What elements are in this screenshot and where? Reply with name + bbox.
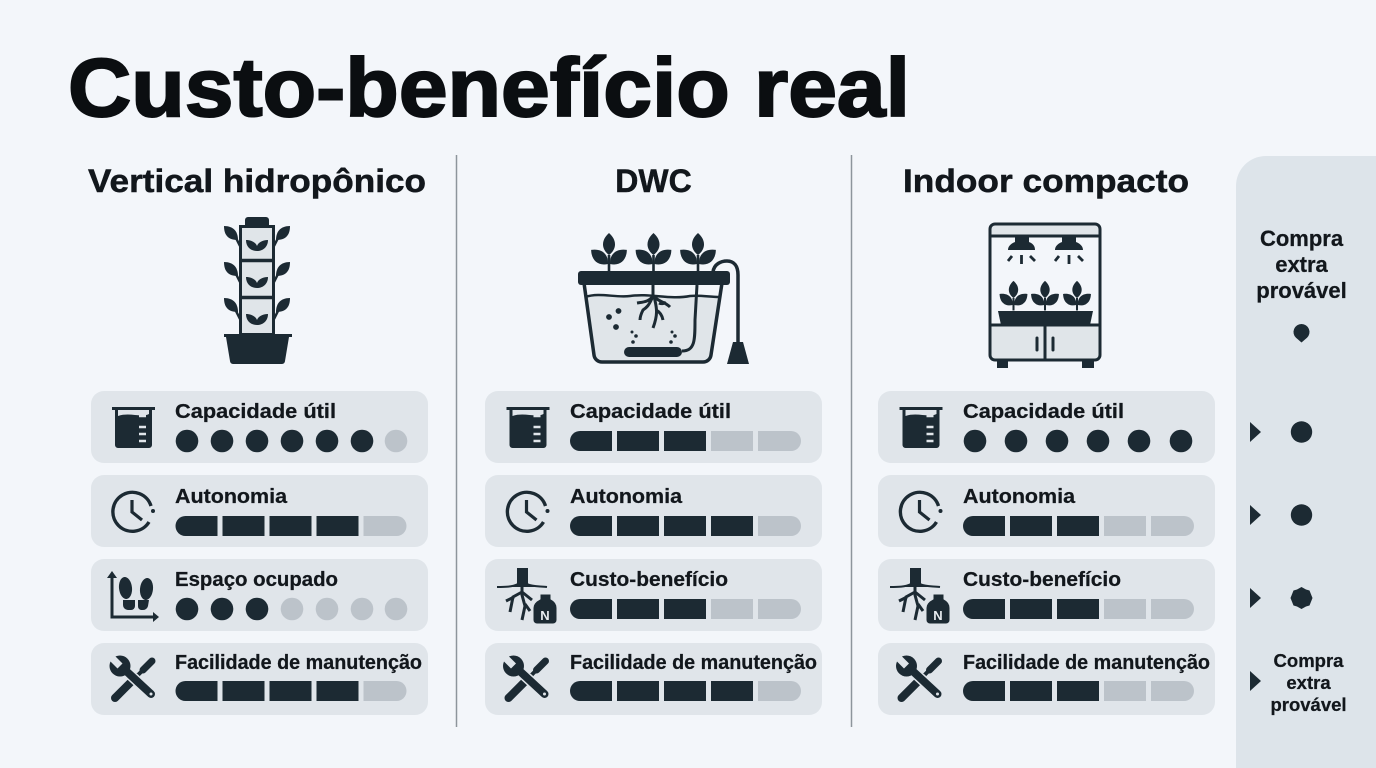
card: Capacidade útil: Capacidade útil	[963, 401, 1124, 423]
heading: Vertical hidropônico: Vertical hidropônico	[88, 163, 426, 199]
card: Facilidade de manutenção: Facilidade de manutenção	[963, 652, 1210, 674]
heading: DWC: DWC	[615, 163, 692, 199]
card: Capacidade útil	[91, 391, 428, 463]
row marker: Autonomia	[1250, 504, 1312, 526]
heading: Compra extra provável: provável	[1256, 278, 1347, 303]
card: Custo-benefício: Custo-benefício	[963, 569, 1121, 591]
card: Facilidade de manutenção: Facilidade de manutenção	[175, 652, 422, 674]
card: Capacidade útil	[878, 391, 1215, 463]
card: Autonomia	[485, 475, 822, 547]
card: Custo-benefício: Custo-benefício	[570, 569, 728, 591]
divider	[456, 155, 852, 727]
card: Espaço ocupado: Espaço ocupado	[175, 569, 338, 591]
panel: DWC	[485, 163, 822, 715]
card: Facilidade de manutenção	[878, 643, 1215, 715]
icon: indoor cabinet	[990, 224, 1100, 368]
card: Autonomia: Autonomia	[963, 486, 1076, 508]
card: Capacidade útil: Capacidade útil	[175, 401, 336, 423]
panel: Indoor compacto	[878, 163, 1215, 715]
card: Autonomia	[91, 475, 428, 547]
card: Espaço ocupado	[91, 559, 428, 631]
card: Facilidade de manutenção	[91, 643, 428, 715]
row marker: Capacidade útil	[1250, 421, 1312, 443]
card: Custo-benefício	[878, 559, 1215, 631]
card: Custo-benefício: N	[540, 608, 550, 623]
card: Autonomia	[878, 475, 1215, 547]
card: Autonomia: Autonomia	[570, 486, 683, 508]
card: Facilidade de manutenção: Facilidade de manutenção	[570, 652, 817, 674]
note: Compra extra provável: provável	[1270, 694, 1347, 715]
card: Facilidade de manutenção	[485, 643, 822, 715]
panel: Compra extra provável	[1236, 156, 1376, 768]
card: Custo-benefício	[485, 559, 822, 631]
card: Custo-benefício: N	[933, 608, 943, 623]
card: Autonomia: Autonomia	[175, 486, 288, 508]
icon: location pin marker	[1294, 324, 1309, 342]
card: Capacidade útil: Capacidade útil	[570, 401, 731, 423]
heading: Indoor compacto: Indoor compacto	[903, 163, 1189, 199]
row marker: Facilidade de manutenção	[1250, 671, 1261, 691]
icon: DWC basin	[578, 233, 749, 364]
icon: vertical tower	[224, 217, 292, 364]
panel: Vertical hidropônico	[88, 163, 428, 715]
heading: Compra extra provável: Compra	[1260, 226, 1344, 251]
heading: Compra extra provável: extra	[1275, 252, 1329, 277]
note: Compra extra provável: Compra	[1274, 650, 1344, 671]
card: Capacidade útil	[485, 391, 822, 463]
row marker: Custo-benefício	[1250, 587, 1312, 609]
title: Custo-benefício real	[68, 41, 910, 134]
note: Compra extra provável: extra	[1286, 672, 1331, 693]
